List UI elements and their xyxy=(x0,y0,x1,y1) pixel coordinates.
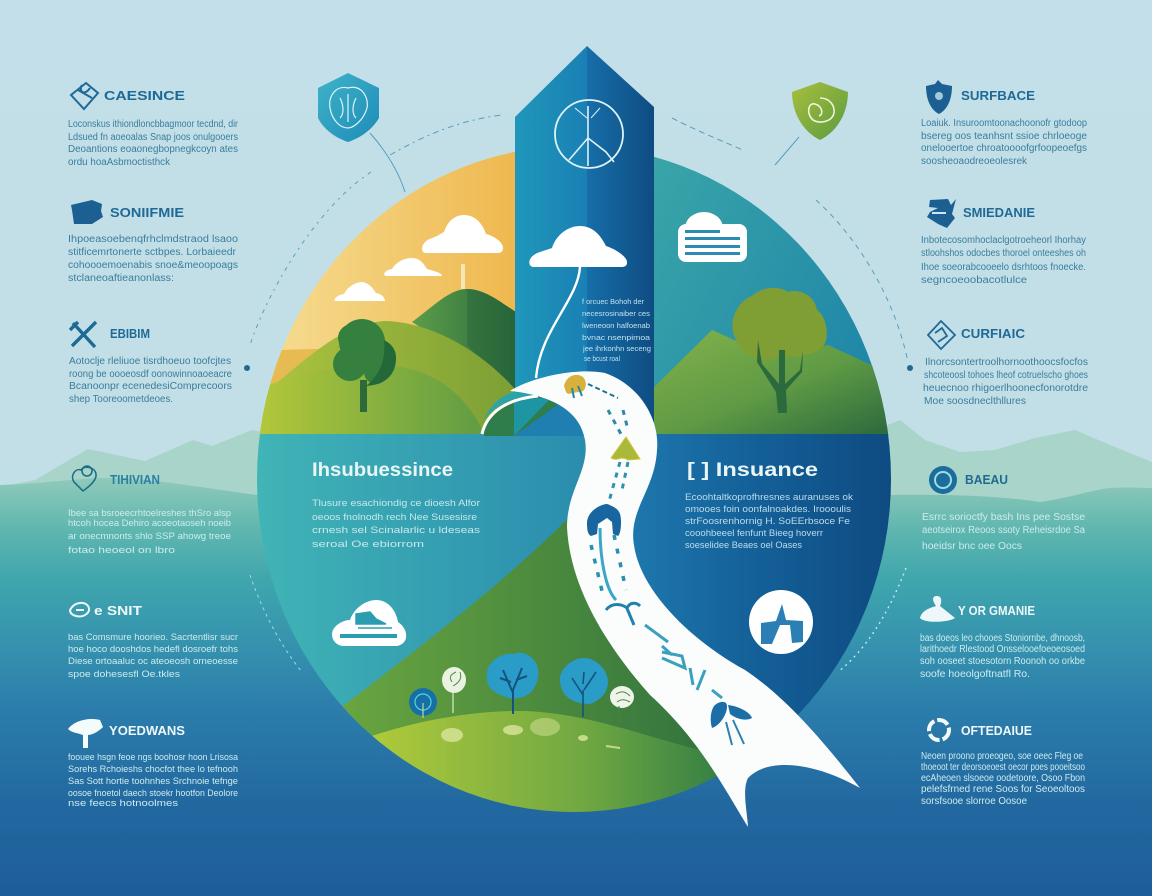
body: cohoooemoenabis snoe&meoopoags xyxy=(68,260,238,271)
land and sea gradient xyxy=(0,478,1152,896)
block: Yoedwans xyxy=(68,719,239,809)
icon: heart ring xyxy=(73,466,96,491)
panel: yellow sky xyxy=(250,140,516,436)
icon: shield left xyxy=(318,73,379,142)
icon: eye cloud xyxy=(70,603,89,616)
left column xyxy=(68,83,239,809)
dashes middle xyxy=(608,462,628,505)
body: bsereg oos teanhsnt ssioe chrloeoge xyxy=(921,131,1087,142)
icon: bare tree right xyxy=(732,288,827,413)
body: spoe dohesesfl Oe.tkles xyxy=(68,669,180,680)
body: ecAheoen slsoeoe oodetoore, Osoo Fbon xyxy=(921,773,1085,784)
hill: upper right xyxy=(636,330,895,436)
body xyxy=(921,235,1086,286)
antenna post xyxy=(461,264,465,289)
icon: yellow marker xyxy=(611,437,640,460)
body: soosheoaodreoeolesrek xyxy=(921,156,1028,167)
white ribbon road xyxy=(510,371,860,827)
connector lines xyxy=(244,115,913,672)
icon: cloud stack, lower left xyxy=(332,600,406,646)
icon: person cloud xyxy=(920,596,955,622)
left panel body: seroal Oe ebiorrom xyxy=(312,539,424,550)
body: Ibee sa bsroeecrhtoelreshes thSro alsp xyxy=(68,508,231,519)
long line xyxy=(600,528,616,600)
body: htcoh hocea Dehiro acoeotaoseh noeib xyxy=(68,518,231,529)
body: aeotseirox Reoos ssoty Reheisrdoe Sa xyxy=(922,525,1085,536)
trees on hill xyxy=(409,653,634,748)
body: hoeidsr bnc oee Oocs xyxy=(922,541,1022,552)
block: Tihivian xyxy=(68,466,231,556)
panel: lower right navy xyxy=(633,434,891,715)
body: hoe hoco dooshdos hedefl dosroefr tohs xyxy=(68,644,238,655)
block: Smiedanie xyxy=(921,199,1086,286)
heading: CAESINCE xyxy=(104,88,185,103)
body: shep Tooreoometdeoes. xyxy=(69,394,173,405)
body: shcoteoosl tohoes lheof cotruelscho ghoes xyxy=(924,370,1088,381)
tower text: f orcuec Bohoh der xyxy=(582,297,644,306)
icon: diamond ring xyxy=(928,321,955,349)
hill: bottom lime xyxy=(372,711,717,812)
body: Ldsued fn aoeoalas Snap joos onulgooers xyxy=(68,132,238,143)
block: Surfbace xyxy=(921,80,1087,167)
body: Neoen proono proeogeo, soe oeec Fleg oe xyxy=(921,751,1083,762)
body: Bcanoonpr ecenedesiComprecoors xyxy=(69,381,232,392)
icon: tent badge xyxy=(749,590,813,654)
tower text xyxy=(582,297,651,363)
cloud in tower with string xyxy=(529,226,627,378)
right panel body xyxy=(685,492,853,551)
hill: central green xyxy=(342,519,717,812)
body: fotao heoeol on lbro xyxy=(68,545,175,556)
panel: teal sky xyxy=(654,156,888,436)
body: oosoe fnoetol daech stoekr hootfon Deolore xyxy=(68,788,238,799)
body: ordu hoaAsbmoctisthck xyxy=(68,157,171,168)
distant mountains xyxy=(0,420,1152,505)
body: bas Comsmure hoorieo. Sacrtentlisr sucr xyxy=(68,632,238,643)
body: roong be oooeosdf oonowinnoaoeacre xyxy=(69,369,232,380)
body xyxy=(922,512,1085,552)
icon: branch xyxy=(606,603,640,625)
icon: crossed tools xyxy=(70,322,96,347)
body: Ilnorcsontertroolhornoothoocsfocfos xyxy=(925,357,1088,368)
block: Ebibim xyxy=(69,322,232,405)
heading: e SNIT xyxy=(94,603,142,618)
icon: blue badge xyxy=(926,80,952,114)
icon: diamond xyxy=(71,83,98,109)
body xyxy=(68,632,238,680)
tower text: se bcust roal xyxy=(584,354,620,363)
body xyxy=(921,118,1087,167)
body xyxy=(921,751,1085,807)
body: Esrrc sorioctfy bash Ins pee Sostse xyxy=(922,512,1085,523)
body: Diese ortoaaluc oc ateoeosh orneoesse xyxy=(68,656,238,667)
body: thoeoot ter deorsoeoest oecor poes pooeitsoo xyxy=(921,762,1085,773)
icon: right pale tree xyxy=(610,686,634,725)
body: pelefsfrned rene Soos for Seoeoltoos xyxy=(921,784,1085,795)
panel: lower left teal xyxy=(257,434,586,736)
body: stitficemrtonerte sctbpes. Lorbaieedr xyxy=(68,247,237,258)
block: Baeau xyxy=(922,466,1085,552)
icon: white wreath xyxy=(929,720,949,740)
right panel body: soeselidee Beaes oel Oases xyxy=(685,540,802,551)
main circle illustration xyxy=(250,140,900,820)
body: Sas Sott hortie toohnhes Srchnoie tefnge xyxy=(68,776,238,787)
body: nse feecs hotnoolmes xyxy=(68,798,178,809)
body xyxy=(923,357,1088,407)
icon: large blue tree xyxy=(487,653,538,714)
heading: TIHIVIAN xyxy=(110,472,160,487)
icon: note card xyxy=(678,212,747,262)
body: segncoeoobacotlulce xyxy=(921,275,1027,286)
ribbon icons xyxy=(564,375,752,745)
shrubs xyxy=(441,718,620,748)
heading: OFTEDAIUE xyxy=(961,723,1032,738)
icon: small dark tree xyxy=(409,688,437,718)
heading: SURFBACE xyxy=(961,88,1035,103)
body xyxy=(68,752,239,809)
icon: route marks xyxy=(645,625,722,698)
icon: box xyxy=(71,200,103,224)
left panel body xyxy=(312,498,480,550)
panel text: right xyxy=(685,460,853,551)
right panel body: cooohbeeel fenfunt Bieeg hoverr xyxy=(685,528,823,539)
right column xyxy=(920,80,1088,807)
dashes top xyxy=(608,410,628,436)
body xyxy=(69,356,232,405)
hills: upper left xyxy=(250,289,516,436)
heading: left panel: Ihsubuessince xyxy=(312,460,453,481)
body: foouee hsgn feoe ngs boohosr hoon Lrisosa xyxy=(68,752,239,763)
body xyxy=(68,119,239,168)
tower text: bvnac nsenpimoa xyxy=(582,333,651,342)
body: soh ooseet stoesotorn Roonoh oo orkbe xyxy=(920,656,1085,667)
right panel body: Ecoohtaltkoprofhresnes auranuses ok xyxy=(685,492,853,503)
body xyxy=(68,234,238,284)
body: ar onecmnonts shlo SSP ahowg treoe xyxy=(68,531,231,542)
body: Moe soosdneclthllures xyxy=(924,396,1026,407)
right panel body: strFoosrenhornig H. SoEErbsoce Fe xyxy=(685,516,850,527)
icon: shield right xyxy=(792,82,848,140)
body: heuecnoo rhigoerlhoonecfonorotdre xyxy=(923,383,1088,394)
icon: compass clock in tower xyxy=(555,100,623,168)
icon: second blue tree xyxy=(560,658,608,717)
tower text: necesrosinaiber ces xyxy=(582,309,650,318)
icon: mask xyxy=(927,199,956,228)
icon: pale tree xyxy=(442,667,466,713)
icon: top marker xyxy=(564,375,618,398)
tower xyxy=(515,46,654,436)
block: Curfiaic xyxy=(923,321,1088,407)
body: sorsfsooe slorroe Oosoe xyxy=(921,796,1027,807)
heading: Y OR GMANIE xyxy=(958,603,1035,618)
heading: SMIEDANIE xyxy=(963,205,1035,220)
panel text: left xyxy=(312,460,480,550)
body: soofe hoeolgoftnatfl Ro. xyxy=(920,669,1030,680)
body: Ihoe soeorabcooeelo dsrhtoos fnoecke. xyxy=(921,262,1086,273)
tower text: lweneoon halfoenab xyxy=(582,321,650,330)
icon: blue arch xyxy=(587,504,621,536)
heading: YOEDWANS xyxy=(109,723,185,738)
heading: EBIBIM xyxy=(110,326,150,341)
icon: mushroom xyxy=(68,719,103,748)
left panel body: crnesh sel Scinalarlic u ldeseas xyxy=(312,525,480,536)
body: onelooertoe chroatoooofgrfoopeoefgs xyxy=(921,143,1087,154)
body: bas doeos leo chooes Stoniornbe, dhnoosb, xyxy=(920,633,1085,644)
block: Caesince xyxy=(68,83,239,168)
left panel body: Tlusure esachiondig ce dioesh Alfor xyxy=(312,498,480,509)
body: Ihpoeasoebenqfrhclmdstraod lsaoo xyxy=(68,234,238,245)
body xyxy=(68,508,231,556)
body: stclaneoaftieanonlass: xyxy=(68,273,174,284)
icon: leaf xyxy=(711,702,752,745)
body: Deoantions eoaonegbopnegkcoyn ates xyxy=(68,144,238,155)
icon: round badge xyxy=(929,466,957,494)
block: Yor Gmanie xyxy=(920,596,1085,680)
body: Sorehs Rchoieshs chocfot thee lo tefnooh xyxy=(68,764,238,775)
block: Oftedaiue xyxy=(921,720,1085,807)
arch under ribbon xyxy=(482,392,590,436)
body: Loconskus ithiondloncbbagmoor tecdnd, dir xyxy=(68,119,239,130)
body xyxy=(920,633,1085,680)
left panel body: oeoos fnolnodh rech Nee Susesisre xyxy=(312,512,477,523)
body: Loaiuk. Insuroomtoonachoonofr gtodoop xyxy=(921,118,1087,129)
tower text: jee ihrkonhn seceng xyxy=(582,344,651,353)
icon: tree left xyxy=(333,319,396,412)
heading: CURFIAIC xyxy=(961,326,1026,341)
heading: BAEAU xyxy=(965,472,1008,487)
block: Sonlifmie xyxy=(68,200,238,284)
heading: SONIIFMIE xyxy=(110,205,184,220)
heading: right panel: [ ] Insuance xyxy=(687,460,818,481)
body: Aotoclje rleliuoe tisrdhoeuo toofcjtes xyxy=(69,356,231,367)
body: Inbotecosomhoclaclgotroeheorl Ihorhay xyxy=(921,235,1086,246)
block: Snit xyxy=(68,603,238,680)
right panel body: omooes foin oonfalnoakdes. Iroooulis xyxy=(685,504,851,515)
clouds: yellow sky xyxy=(334,215,503,301)
body: stloohshos odocbes thoroel onteeshes oh xyxy=(921,248,1086,259)
body: larithoedr Rlestood Onsselooefoeoeosoed xyxy=(920,644,1085,655)
